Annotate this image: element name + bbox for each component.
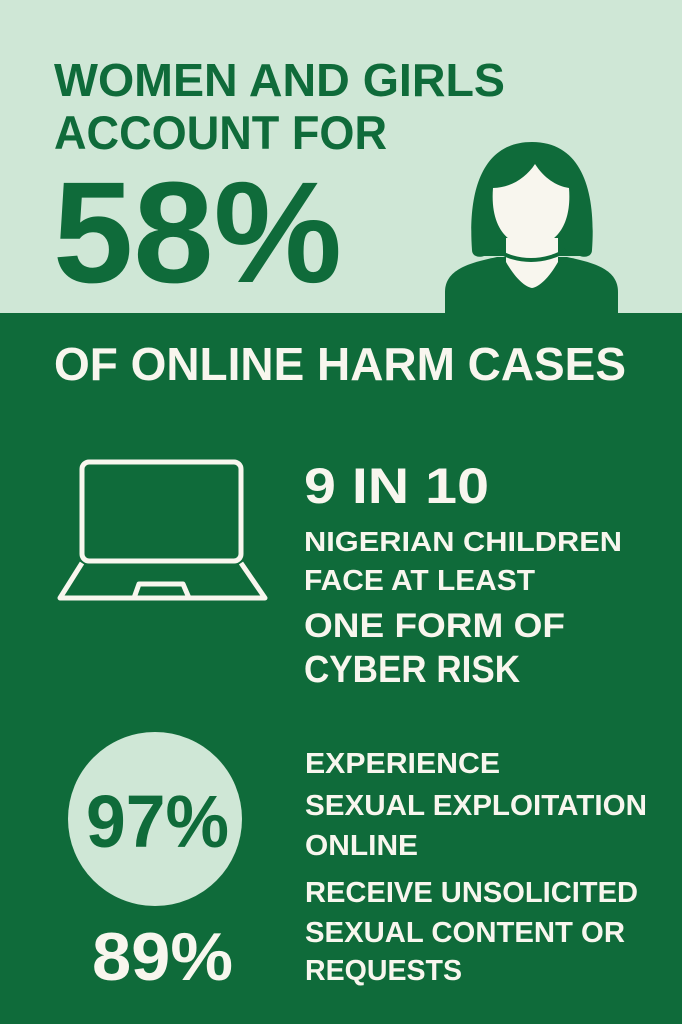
text block: sexual exploitation and unsolicited content: SEXUAL EXPLOITATION — [305, 790, 647, 822]
text block: sexual exploitation and unsolicited content: RECEIVE UNSOLICITED — [305, 877, 638, 909]
circle stat: 97% — [68, 732, 242, 906]
stat block: 9 in 10: CYBER RISK — [304, 649, 521, 691]
heading: women and girls account for — [54, 54, 505, 159]
text block: sexual exploitation and unsolicited content — [305, 748, 647, 987]
stat block: 9 in 10: NIGERIAN CHILDREN — [304, 526, 622, 557]
icon: laptop — [60, 462, 265, 598]
stat block: 9 in 10: ONE FORM OF — [304, 607, 565, 645]
circle stat: 97%: 97% — [86, 780, 229, 863]
stat block: 9 in 10 — [304, 458, 622, 691]
stat block: 9 in 10: 9 IN 10 — [304, 458, 489, 514]
text block: sexual exploitation and unsolicited content: EXPERIENCE — [305, 748, 500, 780]
text block: sexual exploitation and unsolicited content: ONLINE — [305, 830, 418, 862]
stat: 89%: 89% — [92, 919, 233, 995]
text block: sexual exploitation and unsolicited content: SEXUAL CONTENT OR — [305, 917, 625, 949]
panel: dark green body — [0, 313, 682, 1024]
subheading: of online harm cases: OF ONLINE HARM CASES — [54, 338, 626, 390]
stat block: 9 in 10: FACE AT LEAST — [304, 565, 535, 597]
icon: woman silhouette — [445, 142, 618, 313]
text block: sexual exploitation and unsolicited content: REQUESTS — [305, 955, 462, 987]
heading: women and girls account for: WOMEN AND GIRLS — [54, 54, 505, 106]
panel: header light background — [0, 0, 682, 313]
heading: women and girls account for: ACCOUNT FOR — [54, 106, 387, 159]
big stat: 58%: 58% — [53, 152, 342, 313]
